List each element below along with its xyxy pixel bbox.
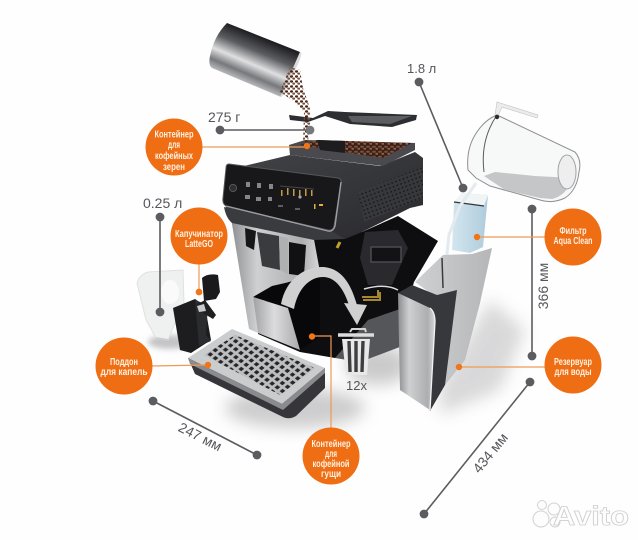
label: 0.25 l: 0.25 л <box>143 195 182 211</box>
callout: water tank: Резервуар <box>554 356 592 368</box>
callout: Aqua Clean filter: Aqua Clean <box>554 235 592 247</box>
label: 1.8 l: 1.8 л <box>407 61 436 76</box>
callout: grounds container: гущи <box>321 468 341 480</box>
arrow: empty grounds <box>281 267 367 325</box>
callout: bean container: зерен <box>163 161 185 173</box>
callout: bean container: кофейных <box>155 150 193 162</box>
bean container and beans <box>289 140 415 166</box>
bean container lid <box>289 111 417 127</box>
dimension: 366 mm <box>528 205 536 360</box>
side vent grille <box>358 167 423 222</box>
dimension: 275 g <box>216 126 314 134</box>
Avito watermark: Avito <box>553 501 629 531</box>
water jug <box>468 102 580 202</box>
LatteGO frother <box>173 274 220 353</box>
label: 247 mm: 247 мм <box>176 419 225 454</box>
icon: steel canister <box>209 23 301 97</box>
coffee machine body <box>223 152 438 362</box>
Avito watermark <box>533 500 629 531</box>
coffee spout <box>245 228 306 276</box>
water filter <box>452 193 488 253</box>
dimension: 0.25 l <box>156 213 164 316</box>
callout: bean container: Контейнер <box>154 128 194 140</box>
dimension: 247 mm <box>149 397 261 459</box>
callout: grounds container: для <box>325 448 337 460</box>
icon: trash can <box>338 329 374 375</box>
callout: Aqua Clean filter: Фильтр <box>560 225 586 237</box>
callout: LatteGO: LatteGO <box>185 238 213 250</box>
callout: grounds container: кофейной <box>312 458 350 470</box>
silver front panel <box>230 214 320 333</box>
glass milk cup <box>137 270 184 340</box>
floor shadows <box>148 300 525 428</box>
machine interior <box>258 216 438 358</box>
brew group <box>337 230 408 300</box>
callout: drip tray: Поддон <box>110 356 138 368</box>
drip tray <box>188 329 325 418</box>
label: 275 g: 275 г <box>208 109 240 125</box>
callout: water tank <box>456 336 602 394</box>
callout: Aqua Clean filter <box>474 208 602 266</box>
machine base wedge <box>335 309 405 362</box>
label: 434 mm: 434 мм <box>469 430 511 476</box>
control panel <box>223 164 341 231</box>
water stream <box>444 183 476 282</box>
callout: drip tray: для капель <box>100 366 148 378</box>
gray dimension lines <box>149 78 536 518</box>
grounds container <box>253 275 320 350</box>
cycle count label: 12x <box>346 378 367 393</box>
dimension: 1.8 l <box>415 78 467 192</box>
tank silver front <box>398 293 435 410</box>
callout: LatteGO <box>170 208 228 295</box>
dimension: 434 mm <box>420 378 534 518</box>
callout: grounds container <box>302 333 360 484</box>
callout: LatteGO: Капучинатор <box>175 228 223 240</box>
callout: grounds container: Контейнер <box>312 438 350 450</box>
callout: drip tray <box>96 338 211 394</box>
callout: bean container <box>146 118 310 176</box>
callout: bean container: для <box>168 139 180 151</box>
machine top housing <box>226 152 423 239</box>
chrome band under panel <box>224 207 345 240</box>
callout: water tank: для воды <box>554 366 592 378</box>
label: 366 mm: 366 мм <box>535 263 551 309</box>
falling coffee beans <box>280 67 310 146</box>
water tank <box>398 248 492 411</box>
